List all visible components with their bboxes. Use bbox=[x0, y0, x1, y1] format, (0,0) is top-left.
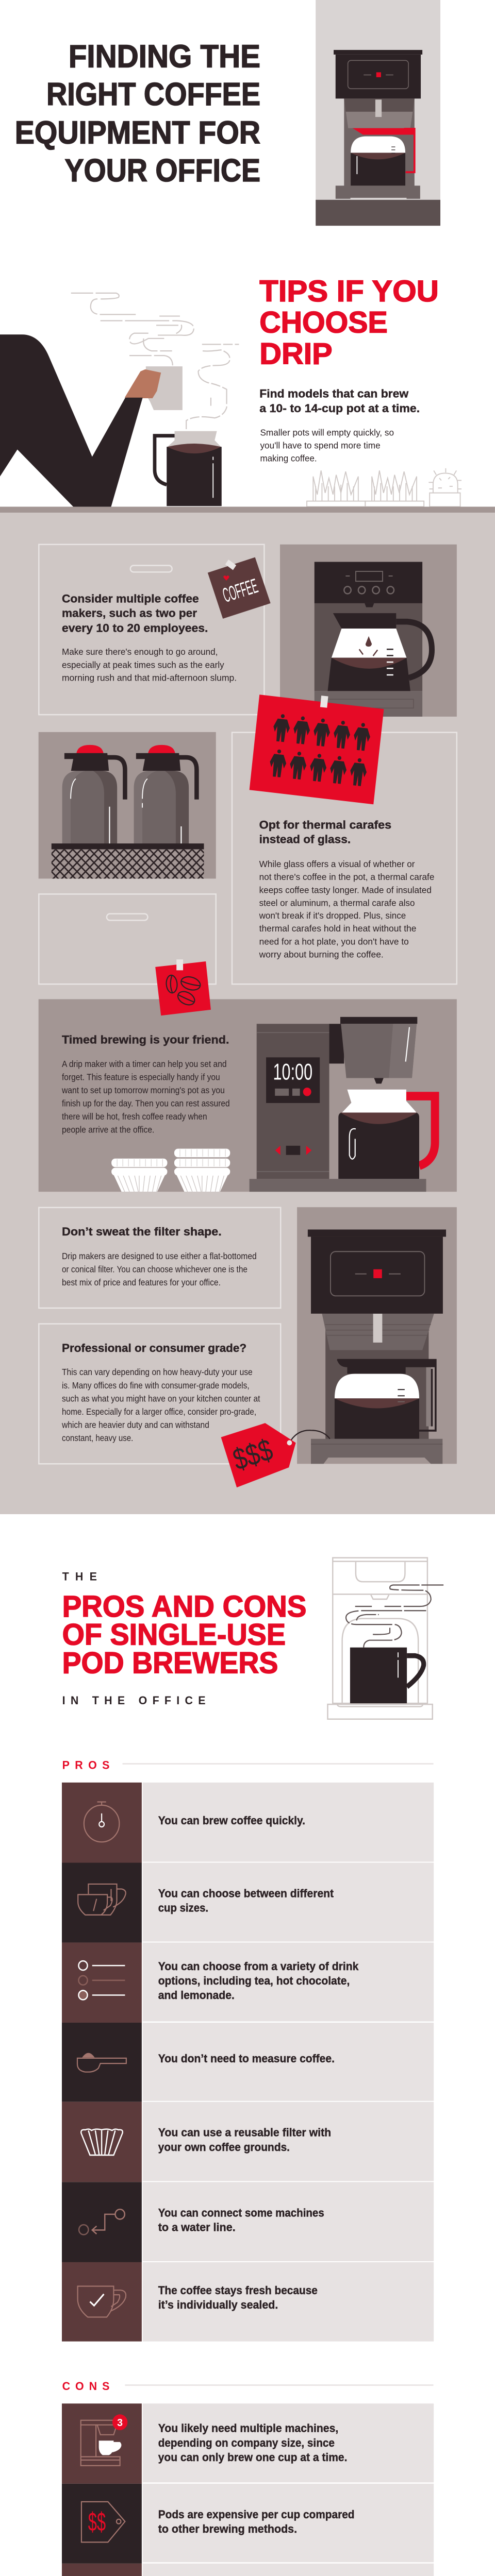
row: stays fresh: The coffee stays fresh because bbox=[158, 2283, 318, 2297]
heading: pros and cons of single-use pod brewers: POD BREWERS bbox=[62, 1647, 278, 1680]
title: FINDING THE bbox=[69, 39, 260, 74]
page section: drip tips part two bbox=[39, 959, 457, 1487]
page section: header and tips intro bbox=[0, 0, 495, 513]
panel: filter shape bbox=[39, 1208, 280, 1308]
note: coffee: COFFEE bbox=[220, 574, 260, 607]
illustration: pod brewer with mug bbox=[327, 1558, 443, 1719]
illustration: timer coffee maker bbox=[250, 1017, 435, 1192]
panel background: drip tips bbox=[0, 513, 495, 1514]
panel: thermal carafes text: not there's coffee in the pot, a thermal carafe bbox=[259, 872, 434, 882]
row: recycling bbox=[62, 2564, 434, 2576]
panel: timed brewing: people arrive at the office. bbox=[62, 1125, 154, 1134]
row: no measuring: You don’t need to measure coffee. bbox=[158, 2052, 335, 2065]
row: water line: You can connect some machines bbox=[158, 2206, 324, 2219]
panel: professional or consumer: such as what you might have on your kitchen counter at bbox=[62, 1394, 260, 1404]
panel: timed brewing: A drip maker with a timer can help you set and bbox=[62, 1059, 227, 1069]
illustration: steam from mug bbox=[71, 293, 194, 365]
panel: timed brewing: want to set up tomorrow morning's pot as you bbox=[61, 1086, 225, 1095]
panel: thermal carafes text bbox=[232, 733, 457, 984]
illustration: timer coffee maker: 10:00 bbox=[273, 1059, 312, 1085]
illustration: carafe with steam bbox=[155, 344, 239, 506]
illustration: large coffee maker bbox=[297, 1207, 457, 1464]
panel: thermal carafes text: thermal carafes hold in heat without the bbox=[259, 924, 416, 934]
empty card with pill bbox=[39, 894, 216, 984]
label: pros: PROS bbox=[62, 1758, 109, 1772]
title: YOUR OFFICE bbox=[65, 152, 260, 188]
panel: thermal carafes text: won't break if it's dropped. Plus, since bbox=[259, 911, 406, 921]
row: expensive: to other brewing methods. bbox=[158, 2522, 297, 2535]
illustration: coffee filters bbox=[111, 1149, 230, 1192]
heading: pros and cons of single-use pod brewers: THE bbox=[62, 1570, 97, 1583]
title: RIGHT COFFEE bbox=[46, 76, 260, 112]
row: water line: to a water line. bbox=[158, 2221, 236, 2233]
panel: timed brewing bbox=[39, 999, 457, 1192]
heading: pros and cons of single-use pod brewers: OF SINGLE-USE bbox=[62, 1619, 286, 1652]
row: multiple machines: depending on company size, since bbox=[158, 2436, 335, 2449]
title bbox=[15, 39, 260, 188]
row: stays fresh: it’s individually sealed. bbox=[158, 2298, 278, 2311]
panel: multiple coffee makers: every 10 to 20 employees. bbox=[62, 621, 208, 635]
panel: filter shape: Drip makers are designed to use either a flat-bottomed bbox=[62, 1251, 257, 1261]
panel: professional or consumer: This can vary depending on how heavy-duty your use bbox=[62, 1367, 253, 1377]
text block: find models: you'll have to spend more time bbox=[260, 440, 381, 451]
row: reusable filter bbox=[62, 2102, 434, 2182]
row: multiple machines: you can only brew one cup at a time. bbox=[158, 2450, 347, 2464]
page section: drip tips part one bbox=[39, 545, 457, 984]
counter floor bbox=[0, 506, 495, 513]
panel: multiple coffee makers: Consider multiple coffee bbox=[62, 592, 199, 605]
illustration: drip coffee maker on counter bbox=[316, 0, 440, 226]
panel: filter shape: Don’t sweat the filter shape. bbox=[62, 1225, 222, 1238]
row: cup sizes bbox=[62, 1862, 434, 1942]
row: reusable filter: your own coffee grounds. bbox=[158, 2140, 290, 2154]
panel: thermal carafes text: need for a hot plate, you don't have to bbox=[259, 937, 409, 947]
illustration: machine with glass carafe bbox=[280, 545, 457, 717]
panel: multiple coffee makers: especially at peak times such as the early bbox=[62, 660, 224, 670]
title: EQUIPMENT FOR bbox=[15, 115, 260, 150]
heading: pros and cons of single-use pod brewers: IN THE OFFICE bbox=[62, 1694, 206, 1707]
label: cons: CONS bbox=[62, 2380, 109, 2393]
text block: find models bbox=[259, 387, 420, 464]
heading: pros and cons of single-use pod brewers: PROS AND CONS bbox=[62, 1590, 306, 1623]
panel: multiple coffee makers: Make sure there's enough to go around, bbox=[62, 647, 218, 657]
heading: tips if you choose drip: CHOOSE bbox=[259, 306, 388, 340]
note: coffee bbox=[208, 557, 271, 619]
row: drink options bbox=[62, 1942, 434, 2023]
panel: thermal carafes text: While glass offers a visual of whether or bbox=[259, 859, 415, 869]
panel: timed brewing: there will be hot, fresh coffee ready when bbox=[62, 1112, 207, 1122]
row: stays fresh bbox=[62, 2262, 434, 2342]
row: water line bbox=[62, 2182, 434, 2262]
panel: filter shape: best mix of price and features for your office. bbox=[62, 1278, 221, 1287]
text block: find models: Find models that can brew bbox=[259, 387, 409, 400]
illustration: plants on shelf bbox=[307, 468, 461, 506]
panel: multiple coffee makers bbox=[39, 545, 264, 715]
panel: thermal carafes text: Opt for thermal carafes bbox=[259, 818, 391, 832]
panel: professional or consumer bbox=[39, 1324, 280, 1464]
illustration: arm holding mug bbox=[0, 334, 183, 506]
row: drink options: options, including tea, hot chocolate, bbox=[158, 1974, 350, 1987]
row: expensive: Pods are expensive per cup compared bbox=[158, 2507, 355, 2521]
panel: timed brewing: forget. This feature is especially handy if you bbox=[62, 1072, 220, 1082]
row: multiple machines bbox=[62, 2403, 434, 2484]
heading: tips if you choose drip bbox=[259, 275, 439, 371]
row: reusable filter: You can use a reusable filter with bbox=[158, 2126, 331, 2139]
panel: professional or consumer: which are heavier duty and can withstand bbox=[61, 1420, 209, 1430]
page section: cons continued and perks bbox=[62, 2564, 449, 2576]
panel: thermal carafes text: steel or aluminum, a thermal carafe also bbox=[259, 898, 415, 908]
text block: find models: making coffee. bbox=[260, 453, 317, 464]
note: coffee beans bbox=[155, 959, 211, 1015]
panel: professional or consumer: Professional or consumer grade? bbox=[62, 1341, 246, 1354]
panel: thermal carafes text: keeps coffee tasty longer. Made of insulated bbox=[259, 885, 432, 895]
panel: multiple coffee makers: makers, such as two per bbox=[62, 606, 197, 620]
price tag bbox=[221, 1423, 330, 1487]
row: brew quickly: You can brew coffee quickly. bbox=[158, 1814, 305, 1827]
panel: professional or consumer: home. Especially for a larger office, consider pro-grade, bbox=[62, 1407, 256, 1417]
panel: thermal carafes text: worry about burning the coffee. bbox=[259, 950, 384, 960]
note: ten employees bbox=[250, 694, 384, 804]
price tag: $$$ bbox=[229, 1433, 276, 1477]
page section: pros and cons header and pros bbox=[62, 1558, 443, 2023]
row: drink options: You can choose from a variety of drink bbox=[158, 1960, 359, 1973]
illustration: thermal carafes in basket bbox=[39, 732, 216, 878]
panel: thermal carafes text: instead of glass. bbox=[259, 833, 351, 846]
text block: find models: Smaller pots will empty quickly, so bbox=[260, 428, 394, 438]
row: expensive: $$ bbox=[88, 2507, 106, 2536]
heading: tips if you choose drip: DRIP bbox=[259, 338, 333, 371]
panel: multiple coffee makers: morning rush and that mid-afternoon slump. bbox=[62, 673, 237, 683]
heading: pros and cons of single-use pod brewers bbox=[62, 1570, 306, 1707]
panel: timed brewing: Timed brewing is your friend. bbox=[62, 1033, 229, 1046]
row: multiple machines: 3 bbox=[117, 2417, 123, 2429]
row: cup sizes: You can choose between different bbox=[158, 1887, 334, 1900]
page section: pros continued and cons bbox=[62, 2023, 434, 2564]
heading: tips if you choose drip: TIPS IF YOU bbox=[259, 275, 439, 308]
row: no measuring bbox=[62, 2023, 434, 2102]
row: cup sizes: cup sizes. bbox=[158, 1901, 208, 1914]
panel: timed brewing: finish up for the day. Then you can rest assured bbox=[62, 1098, 230, 1108]
panel: filter shape: or conical filter. You can choose whichever one is the bbox=[62, 1264, 248, 1275]
row: drink options: and lemonade. bbox=[158, 1989, 235, 2002]
row: expensive bbox=[62, 2484, 434, 2564]
row: multiple machines: You likely need multiple machines, bbox=[158, 2421, 338, 2435]
panel: professional or consumer: is. Many offices do fine with consumer-grade models, bbox=[62, 1381, 250, 1391]
panel: professional or consumer: constant, heavy use. bbox=[62, 1433, 133, 1443]
row: brew quickly bbox=[62, 1783, 434, 1862]
text block: find models: a 10- to 14-cup pot at a time. bbox=[259, 401, 420, 415]
